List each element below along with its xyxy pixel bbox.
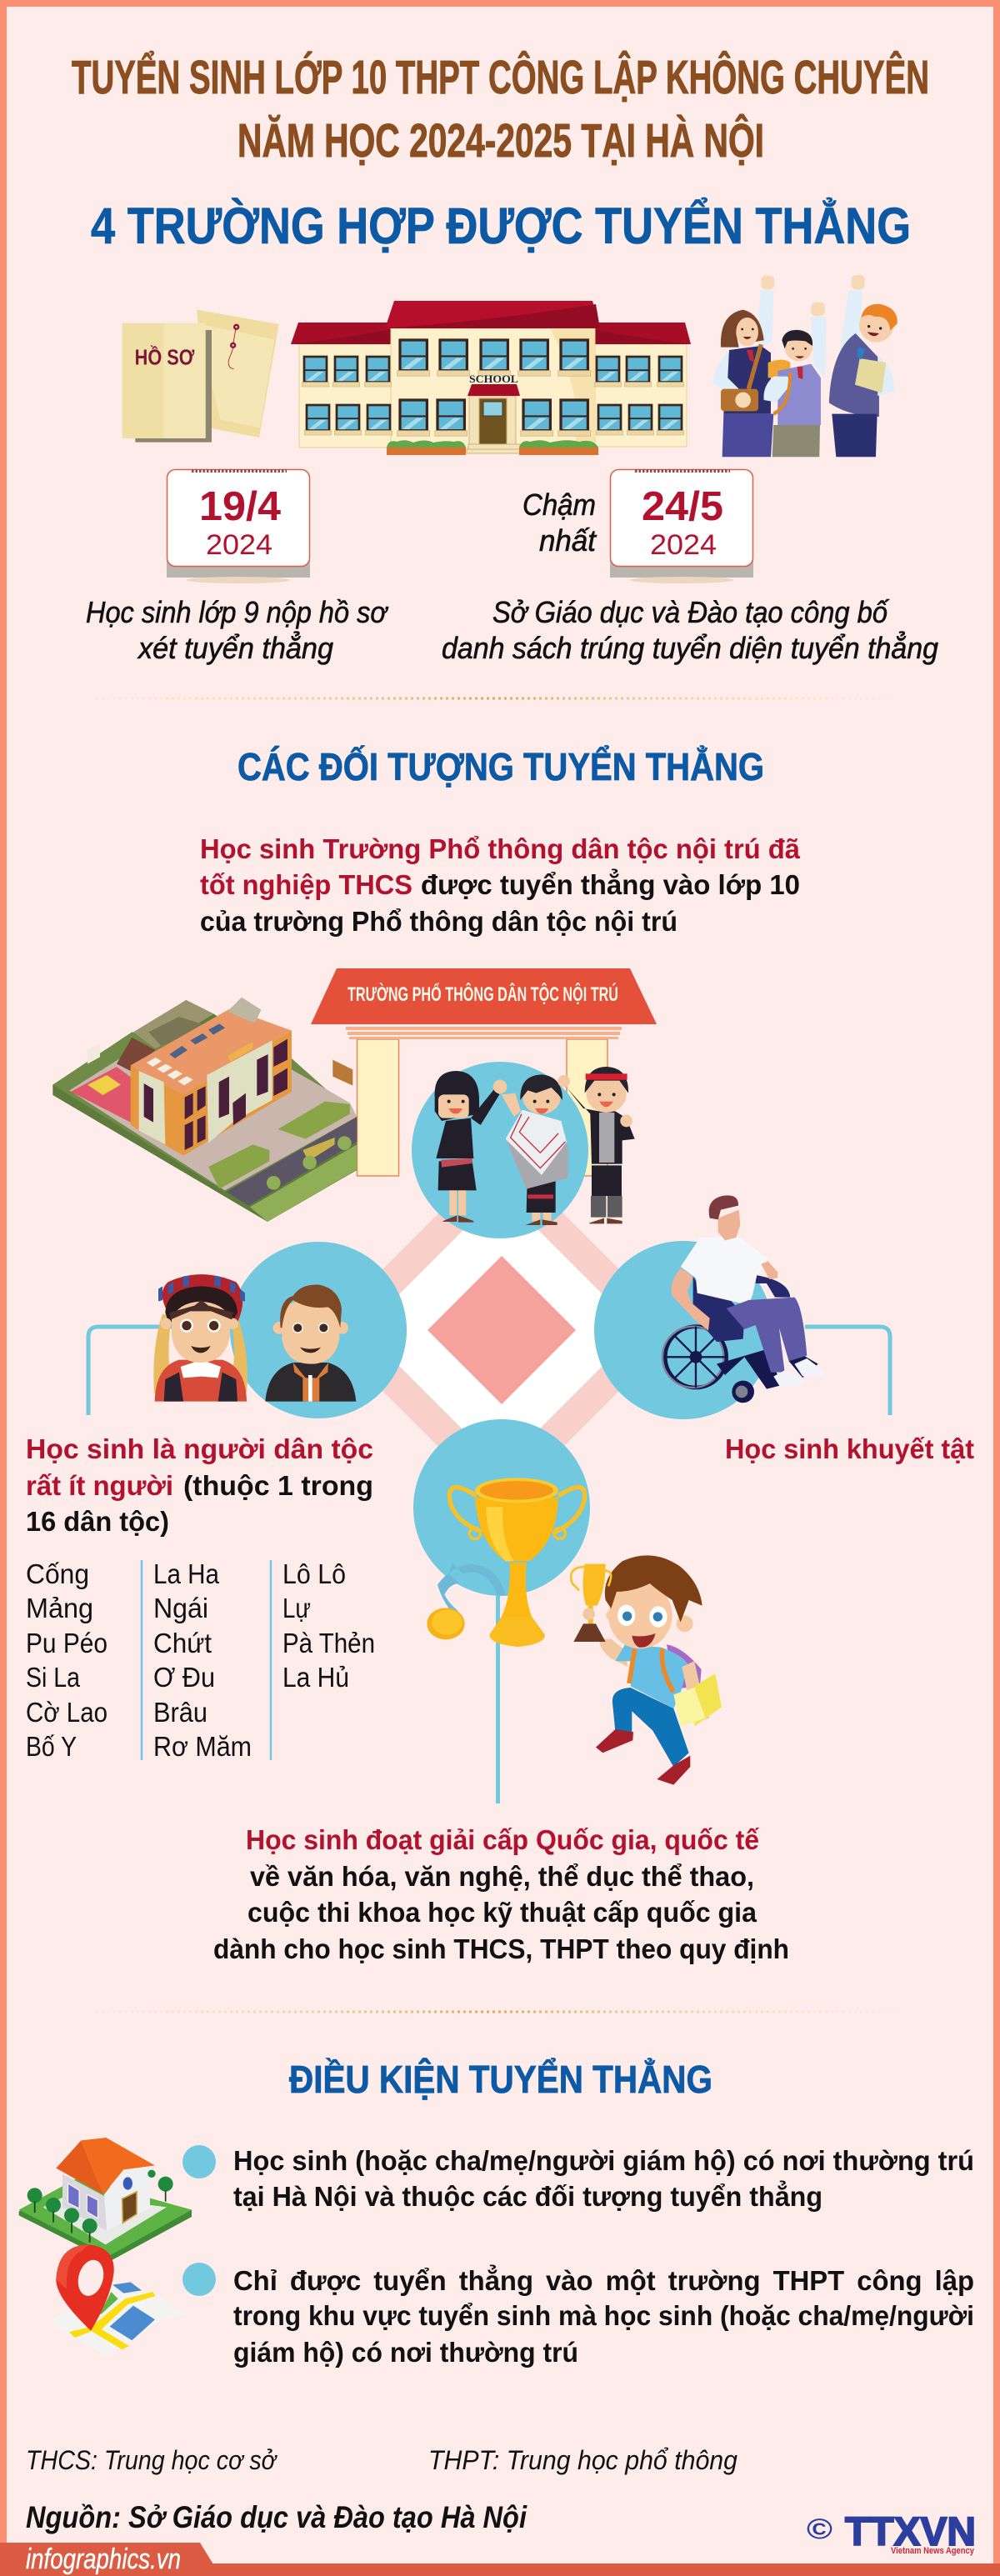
text: boarding school students	[200, 833, 801, 937]
text: students with disabilities: Học sinh khuyết tật	[725, 1433, 974, 1464]
text: condition 2: giám hộ) có nơi thường trú	[233, 2337, 578, 2368]
list: ethnic groups column 3: La Hủ	[282, 1662, 349, 1693]
list: ethnic groups column 2: Rơ Măm	[153, 1731, 252, 1762]
text: national and international prize winners: dành cho học sinh THCS, THPT theo quy định	[213, 1933, 789, 1964]
icon: house and map pin	[19, 2138, 192, 2356]
connector: right bracket	[805, 1327, 890, 1415]
text: national and international prize winners: cuộc thi khoa học kỹ thuật cấp quốc gia	[248, 1897, 758, 1928]
heading: conditions: ĐIỀU KIỆN TUYỂN THẲNG	[289, 2058, 712, 2101]
footer strip: infographics.vn	[26, 2543, 181, 2575]
icon: ethnic minority faces	[153, 1274, 356, 1402]
circle: top	[412, 1062, 588, 1238]
source: Nguồn: Sở Giáo dục và Đào tạo Hà Nội	[26, 2500, 528, 2534]
icon: three students	[713, 275, 898, 457]
list: ethnic groups column 1: Cống	[26, 1558, 89, 1589]
text: boarding school students: Học sinh Trường Phổ thông dân tộc nội trú đã	[200, 833, 801, 864]
bullet 2	[182, 2263, 216, 2296]
calendar: 24/5 2024	[610, 470, 753, 583]
text: submission step: Học sinh lớp 9 nộp hồ sơ	[86, 595, 389, 629]
icon: trophy, medal and boy	[427, 1478, 722, 1785]
list: ethnic groups column 2: Brâu	[153, 1697, 208, 1728]
calendar: 19/4 2024: 19/4	[199, 484, 281, 529]
list: ethnic groups column 1: Cờ Lao	[26, 1697, 108, 1728]
text: submission step	[86, 595, 389, 665]
icon: school building	[291, 301, 691, 455]
gate: boarding school: TRƯỜNG PHỔ THÔNG DÂN TỘC NỘI TRÚ	[348, 983, 618, 1006]
note: THCS: THCS: Trung học cơ sở	[26, 2445, 278, 2475]
icon: student in wheelchair	[662, 1195, 823, 1403]
connector: bottom line	[496, 1596, 500, 1803]
list: ethnic groups column 3: Lô Lô	[282, 1558, 346, 1589]
label: at the latest: Chậm	[522, 488, 596, 522]
icon: ethnic minority students	[435, 1067, 635, 1225]
text: boarding school students: của trường Phổ thông dân tộc nội trú	[200, 906, 678, 937]
text: ethnic minority students: Học sinh là người dân tộc	[26, 1433, 373, 1464]
list: ethnic groups column 2: Ngái	[153, 1593, 208, 1623]
calendar: 19/4 2024	[167, 470, 310, 583]
list: ethnic groups column 3: Pà Thẻn	[282, 1628, 375, 1658]
heading: eligible groups: CÁC ĐỐI TƯỢNG TUYỂN THẲNG	[238, 745, 764, 788]
text: condition 1	[233, 2145, 974, 2212]
calendar: 24/5 2024: 2024	[650, 529, 717, 561]
list: ethnic groups column 2	[153, 1558, 252, 1762]
text: boarding school students: được tuyển thẳng vào lớp 10	[421, 868, 800, 900]
icon: application folder	[122, 310, 279, 443]
circle: left	[230, 1242, 407, 1418]
list: ethnic groups column 3	[282, 1558, 375, 1693]
list: ethnic groups column 2: Ơ Đu	[153, 1662, 215, 1693]
list: ethnic groups column 3: Lự	[282, 1593, 311, 1623]
gate: boarding school	[311, 968, 657, 1176]
text: boarding school students: tốt nghiệp THCS	[200, 869, 412, 900]
text: ethnic minority students: (thuộc 1 trong	[183, 1470, 373, 1501]
text: condition 1: tại Hà Nội và thuộc các đối tượng tuyển thẳng	[233, 2180, 822, 2212]
circle: bottom	[413, 1419, 590, 1596]
icon: school building: SCHOOL	[469, 373, 518, 385]
title: NĂM HỌC 2024-2025 TẠI HÀ NỘI	[238, 113, 764, 168]
calendar: 19/4 2024: 2024	[206, 529, 272, 561]
text: announcement step: Sở Giáo dục và Đào tạo công bố	[492, 595, 890, 629]
text: condition 2	[233, 2264, 974, 2368]
text: announcement step: danh sách trúng tuyển diện tuyển thẳng	[442, 630, 938, 665]
circle: right	[594, 1241, 772, 1419]
list: ethnic groups column 2: La Ha	[153, 1558, 220, 1589]
calendar: 24/5 2024: 24/5	[642, 484, 723, 529]
logo: TTXVN: ©	[807, 2513, 832, 2545]
diamond connector	[322, 1151, 680, 1509]
icon: isometric school campus	[52, 998, 357, 1222]
text: announcement step	[442, 595, 938, 665]
logo: TTXVN: TTXVN	[845, 2510, 976, 2554]
list: ethnic groups column 1: Si La	[26, 1662, 81, 1693]
text: ethnic minority students: 16 dân tộc)	[26, 1506, 169, 1537]
connector: left bracket	[88, 1327, 175, 1415]
text: ethnic minority students: rất ít người	[26, 1470, 173, 1501]
text: national and international prize winners: Học sinh đoạt giải cấp Quốc gia, quốc tế	[246, 1824, 760, 1855]
text: condition 2: trong khu vực tuyển sinh mà học sinh (hoặc cha/mẹ/người	[233, 2300, 974, 2331]
icon: application folder: HỒ SƠ	[135, 344, 195, 369]
label: at the latest: nhất	[539, 523, 598, 558]
list: ethnic groups column 1: Pu Péo	[26, 1628, 108, 1658]
list: ethnic groups column 1: Mảng	[26, 1593, 93, 1623]
list: ethnic groups column 1	[26, 1558, 108, 1762]
list: ethnic groups column 2: Chứt	[153, 1628, 212, 1658]
note: THPT: THPT: Trung học phổ thông	[428, 2445, 738, 2475]
label: at the latest	[522, 488, 598, 558]
text: national and international prize winners: về văn hóa, văn nghệ, thể dục thể thao,	[250, 1861, 754, 1892]
list: ethnic groups column 1: Bố Y	[26, 1731, 77, 1762]
footer strip	[0, 2543, 1000, 2576]
title	[72, 50, 929, 168]
text: submission step: xét tuyển thẳng	[137, 630, 333, 665]
text: condition 2: Chỉ được tuyển thẳng vào một trường THPT công lập	[233, 2264, 974, 2296]
bullet 1	[182, 2145, 216, 2178]
text: condition 1: Học sinh (hoặc cha/mẹ/người giám hộ) có nơi thường trú	[233, 2145, 974, 2176]
logo: TTXVN: Vietnam News Agency	[891, 2546, 975, 2556]
text: national and international prize winners	[213, 1824, 789, 1964]
text: ethnic minority students	[26, 1433, 373, 1537]
